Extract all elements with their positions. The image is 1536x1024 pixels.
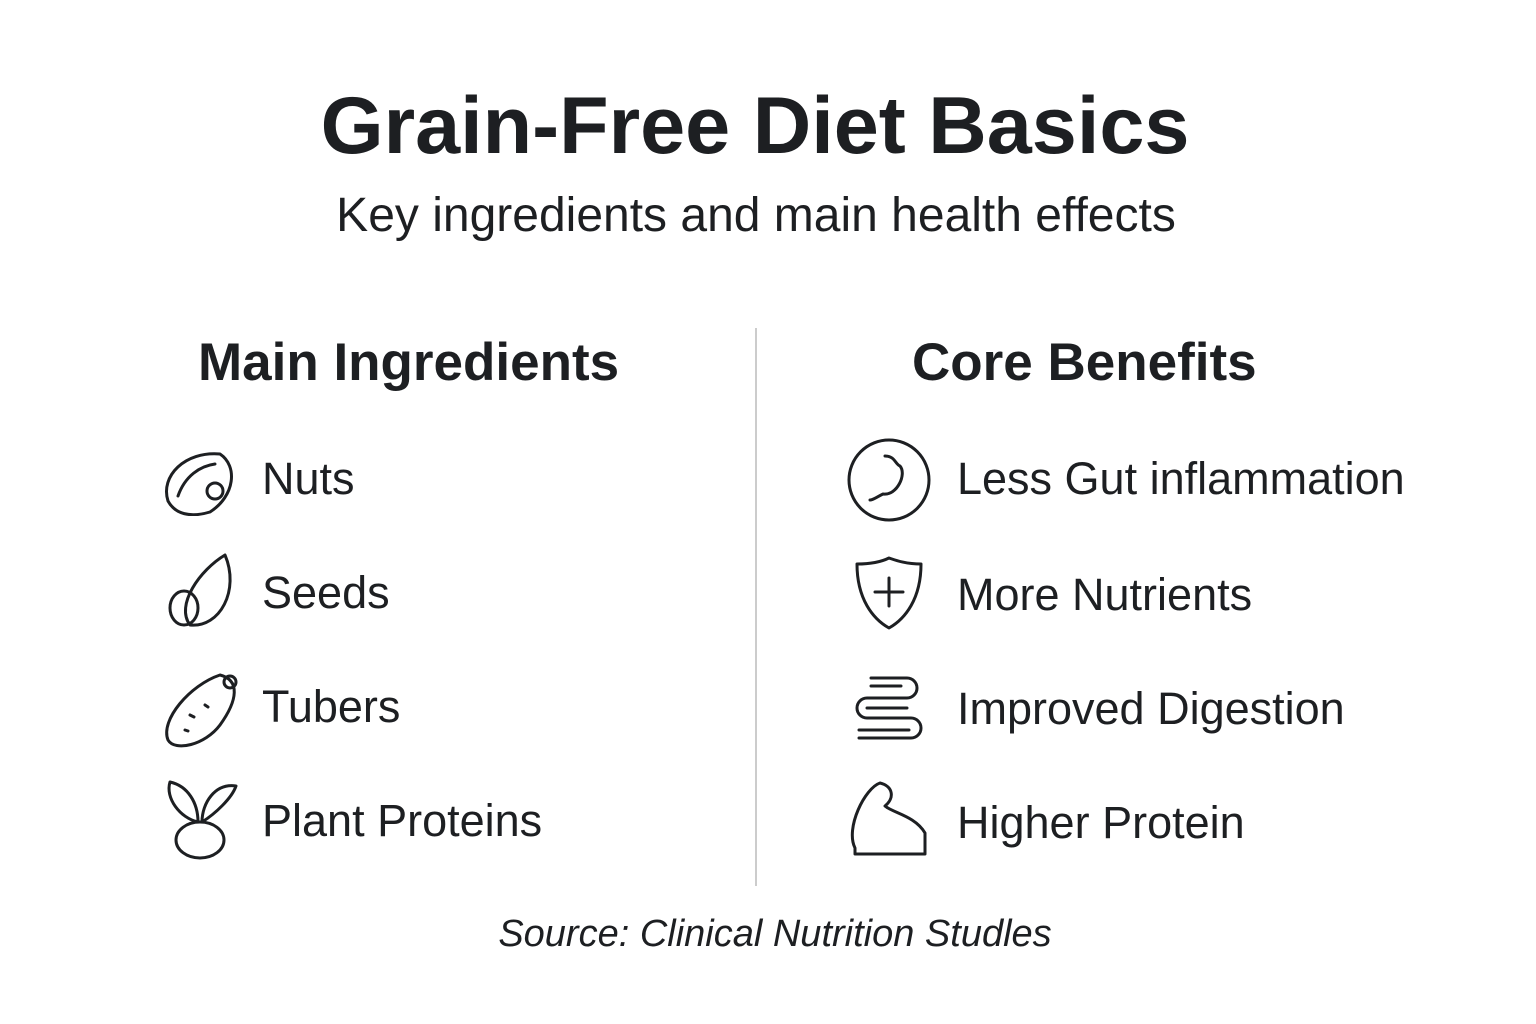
icon: plant protein xyxy=(168,780,238,860)
icon: seeds xyxy=(168,553,232,627)
text: protein: Higher Protein xyxy=(957,797,1245,848)
text: nuts: Nuts xyxy=(262,453,355,504)
text: gut: Less Gut inflammation xyxy=(957,453,1405,504)
text: plant proteins: Plant Proteins xyxy=(262,795,542,846)
heading: core benefits: Core Benefits xyxy=(912,333,1257,392)
panel: benefits xyxy=(848,438,1405,856)
text: tubers: Tubers xyxy=(262,681,400,732)
source: Source: Clinical Nutrition Studles xyxy=(498,913,1052,955)
icon: intestine xyxy=(856,676,922,740)
panel: ingredients xyxy=(165,452,542,860)
title: Grain-Free Diet Basics xyxy=(321,81,1189,171)
text: seeds: Seeds xyxy=(262,567,390,618)
icon: shield xyxy=(856,556,922,630)
divider xyxy=(755,328,757,886)
heading: main ingredients: Main Ingredients xyxy=(198,333,619,392)
text: digestion: Improved Digestion xyxy=(957,683,1345,734)
text: nutrients: More Nutrients xyxy=(957,569,1252,620)
icon: tuber xyxy=(165,674,238,748)
icon: nut xyxy=(165,452,233,516)
icon: muscle xyxy=(850,782,926,856)
icon: stomach xyxy=(848,438,930,522)
subtitle: Key ingredients and main health effects xyxy=(336,189,1176,242)
